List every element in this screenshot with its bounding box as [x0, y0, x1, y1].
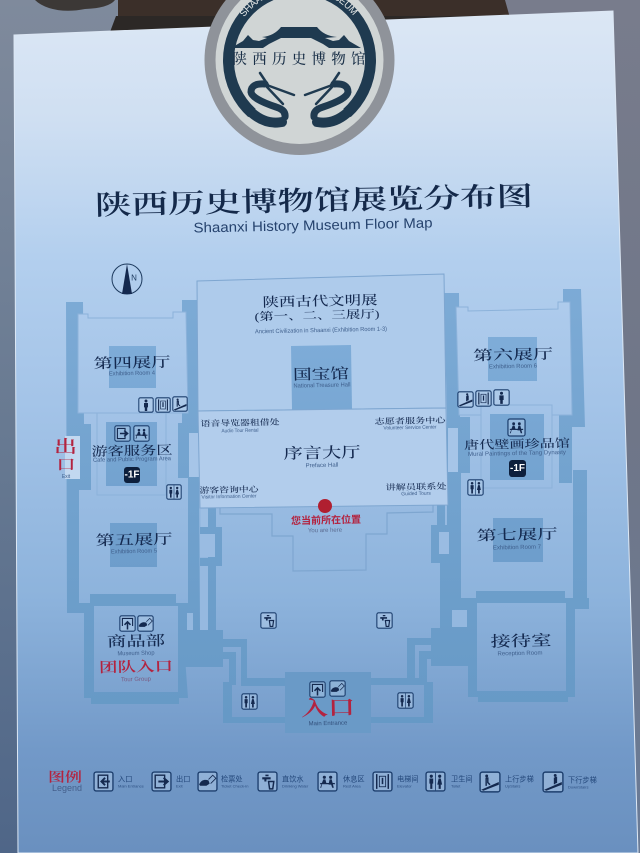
compass: N: [131, 274, 137, 282]
legend: [48, 770, 597, 793]
guided tours english: Guided Tours: [401, 491, 431, 497]
exit english: Exit: [62, 474, 71, 480]
legend item: downstairs: DownStairs: [568, 784, 588, 790]
tour group english: Tour Group: [121, 677, 152, 683]
service area square: [106, 422, 157, 486]
room: ancient civilization hall: [197, 274, 446, 411]
national treasure name: 国宝馆: [293, 365, 350, 384]
room 5 label square: [110, 523, 157, 567]
audio tour label: 语音导览器租借处: [200, 417, 281, 428]
legend item: elevator: [373, 772, 419, 791]
legend item: water: 直饮水: [282, 774, 304, 784]
exit marker: [54, 436, 80, 480]
icon: toilet east: [494, 390, 509, 405]
room: exhibition 6: [456, 302, 572, 415]
preface name: 序言大厅: [283, 444, 361, 463]
icon: elevator east: [476, 391, 491, 406]
reception name: 接待室: [490, 631, 552, 651]
icon: basement level murals: -1F: [510, 463, 525, 474]
wooden sign support: [35, 0, 512, 32]
room: tang murals: [464, 405, 571, 488]
audio tour english: Audio Tour Rental: [221, 428, 259, 434]
icon: basement level: -1F: [124, 470, 140, 480]
room: museum shop: [94, 606, 178, 692]
icon: elevator west: [156, 398, 170, 412]
icon: rest area murals: [508, 419, 525, 436]
national treasure square: [291, 345, 352, 410]
legend item: exit: [152, 772, 190, 791]
room 7 name: 第七展厅: [476, 527, 558, 544]
guided tours label: 讲解员联系处: [385, 481, 448, 492]
icon: ticket check: [330, 681, 345, 696]
reception english: Reception Room: [497, 651, 543, 657]
legend title english: Legend: [52, 783, 82, 793]
visitor info english: Visitor Information Center: [201, 493, 257, 501]
icon: toilet west: [139, 398, 153, 412]
legend item: toilet: Toilet: [451, 784, 461, 788]
legend item: water: [258, 772, 309, 791]
icon: entrance: [310, 682, 325, 697]
west wing walls: [66, 300, 285, 723]
subtitle: Shaanxi History Museum Floor Map: [193, 214, 433, 236]
hall name: 陕西古代文明展: [262, 292, 378, 310]
legend item: upstairs: [480, 772, 534, 792]
shop name: 商品部: [107, 631, 166, 651]
room 6 label square: [488, 337, 537, 381]
icon: restrooms lobby east: [398, 693, 413, 708]
icon: exit: [115, 426, 130, 441]
room 6 english: Exhibition Room 6: [489, 363, 538, 371]
icon: water west: [261, 613, 276, 628]
icon: rest area: [134, 426, 149, 441]
room 5 name: 第五展厅: [95, 532, 173, 549]
volunteer label: 志愿者服务中心: [374, 415, 447, 426]
legend item: ticket: Ticket Check-in: [221, 784, 248, 788]
room 7 label square: [493, 518, 543, 562]
room: exhibition 7: [476, 518, 558, 562]
legend item: water: Drinking Water: [282, 784, 309, 788]
tour group label: 团队入口: [99, 658, 173, 676]
logo name: 陕西历史博物馆: [232, 50, 366, 68]
icon: stairs west: [173, 397, 187, 411]
room 6 name: 第六展厅: [473, 347, 553, 364]
legend item: upstairs: 上行步梯: [505, 774, 534, 784]
murals name: 唐代壁画珍品馆: [464, 436, 571, 452]
legend item: toilet: 卫生间: [451, 774, 473, 784]
legend item: exit: Exit: [176, 784, 184, 788]
compass: [112, 264, 142, 294]
icon: water east: [377, 613, 392, 628]
room 7 english: Exhibition Room 7: [493, 544, 542, 552]
legend item: downstairs: [543, 772, 597, 792]
entrance english: Main Entrance: [309, 721, 348, 727]
you are here english: You are here: [308, 528, 343, 534]
title: 陕西历史博物馆展览分布图: [95, 180, 533, 221]
main entrance block: [285, 672, 371, 733]
room 4 label square: [109, 346, 156, 388]
service area english: Cafe and Public Program Area: [93, 456, 172, 464]
room: preface hall: [198, 408, 448, 508]
floor plan: [54, 274, 589, 733]
entrance label: 入口: [301, 695, 355, 721]
legend title: 图例: [48, 770, 82, 784]
room: exhibition 5: [95, 523, 173, 567]
legend item: toilet: [426, 772, 473, 791]
logo dragons: [251, 73, 348, 123]
national treasure english: National Treasure Hall: [293, 382, 351, 390]
icon: shop ticket: [138, 616, 153, 631]
service area name: 游客服务区: [91, 442, 173, 459]
legend item: entrance: [94, 772, 145, 791]
legend item: downstairs: 下行步梯: [568, 776, 597, 784]
legend item: ticket: 检票处: [221, 774, 243, 784]
legend item: upstairs: UpStairs: [505, 784, 520, 788]
murals label square: [490, 414, 544, 480]
icon: restrooms west: [167, 485, 181, 499]
room 4 name: 第四展厅: [93, 355, 171, 372]
shop english: Museum Shop: [117, 651, 155, 657]
logo: museum emblem: [204, 0, 394, 155]
legend item: entrance: 入口: [118, 774, 132, 784]
you are here marker: [291, 499, 361, 534]
stepped lobby line: [220, 505, 433, 571]
room: exhibition 4: [78, 312, 188, 413]
icon: restrooms lobby west: [242, 694, 257, 709]
icon: restrooms east: [468, 480, 483, 495]
legend item: rest: [318, 772, 365, 791]
you are here label: 您当前所在位置: [291, 513, 361, 527]
preface english: Preface Hall: [306, 463, 338, 469]
volunteer english: Volunteer Service Center: [383, 424, 437, 432]
legend item: rest: 休息区: [343, 774, 365, 784]
legend item: rest: Rest Area: [343, 784, 361, 788]
icon: stairs east: [458, 392, 473, 407]
legend item: entrance: Main Entrance: [118, 784, 145, 788]
murals english: Mural Paintings of the Tang Dynasty: [468, 450, 566, 458]
legend item: exit: 出口: [176, 774, 190, 784]
visitor info label: 游客咨询中心: [199, 484, 260, 495]
room 5 english: Exhibition Room 5: [111, 549, 158, 555]
exit label lower: 口: [56, 458, 76, 474]
room: visitor service area: [91, 413, 173, 495]
exit label: 出: [54, 438, 77, 456]
legend item: elevator: Elevator: [397, 784, 412, 788]
legend item: ticket: [198, 772, 248, 791]
room: reception: [477, 603, 566, 691]
corridor openings: [187, 428, 467, 630]
legend item: elevator: 电梯间: [397, 774, 419, 784]
room 4 english: Exhibition Room 4: [109, 371, 156, 377]
icon: shop entrance: [120, 616, 135, 631]
east wing walls: [370, 289, 589, 723]
logo roof: [231, 27, 361, 48]
hall english: Ancient Civilization in Shaanxi (Exhibition Room 1-3): [255, 327, 387, 335]
hall rooms: (第一、二、三展厅): [254, 308, 380, 323]
